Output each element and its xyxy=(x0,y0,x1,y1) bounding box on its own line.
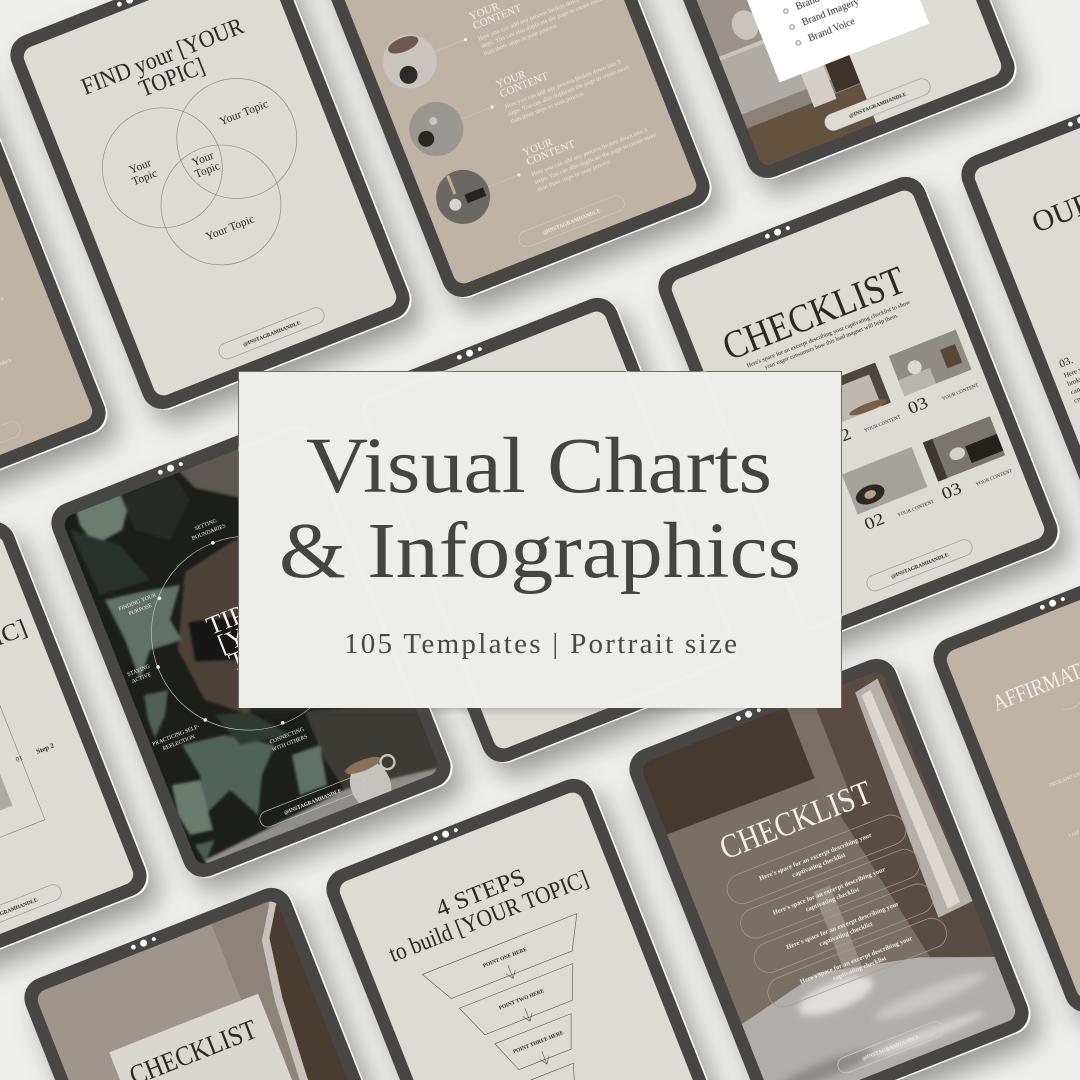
tablet: left steps page xyxy=(0,515,155,994)
step labels: 01 xyxy=(15,754,24,764)
circle photo three xyxy=(436,170,490,224)
title panel xyxy=(62,187,1047,867)
squiggle xyxy=(1062,702,1080,710)
pill text: captivating checklist xyxy=(805,886,861,914)
content one: than three steps in your process xyxy=(483,22,559,57)
heading: TOPIC] xyxy=(225,619,313,677)
pill text: Here's space for an excerpt describing your xyxy=(799,935,914,986)
pill text: captivating checklist xyxy=(832,955,888,982)
venn labels xyxy=(128,102,268,240)
handle pill xyxy=(217,305,327,361)
heading: FIND your [YOUR xyxy=(78,13,248,101)
content three: than three steps in your process xyxy=(536,158,612,193)
venn labels: Your xyxy=(190,150,216,169)
photo: bed xyxy=(808,362,891,429)
heading: CHECKLIST xyxy=(715,774,877,867)
tablet: find your topic venn xyxy=(4,0,418,417)
ring labels xyxy=(84,516,310,793)
pill text: Here's space for an excerpt describing your xyxy=(758,832,873,882)
tablet: left beige content page xyxy=(0,137,108,470)
tablet: brand list with photo xyxy=(683,0,1017,179)
screen xyxy=(974,128,1080,446)
photo frame xyxy=(0,705,45,892)
subtitle: 105 Templates | Portrait size xyxy=(344,628,737,660)
content two: CONTENT xyxy=(498,70,550,100)
content three: Here you can add any process broken down into 3 xyxy=(531,126,648,178)
handle text: @INSTAGRAMHANDLE xyxy=(542,208,602,236)
ring labels: PURPOSE xyxy=(128,603,154,617)
connector dots xyxy=(463,37,521,177)
connectors xyxy=(435,40,519,187)
handle pill xyxy=(836,1019,946,1075)
heading: [YOUR xyxy=(214,601,301,659)
heading: TOPIC] xyxy=(136,53,208,103)
funnel labels: POINT TWO HERE xyxy=(498,988,545,1011)
pill text xyxy=(758,832,917,994)
ring labels: FINDING YOUR xyxy=(118,592,158,613)
content two: Here you can add any process broken down into 3 xyxy=(504,59,622,110)
ring labels: STAYING xyxy=(127,664,151,678)
screen xyxy=(337,789,715,1080)
tablet: 4 steps funnel xyxy=(320,772,734,1080)
circle photo one xyxy=(382,34,437,88)
venn labels: Topic xyxy=(193,160,222,181)
screen xyxy=(946,600,1080,996)
venn diagram xyxy=(102,78,298,266)
ring labels: ACTIVE xyxy=(131,672,153,685)
pill list xyxy=(723,811,951,1011)
faint tablets through panel xyxy=(62,187,1047,867)
pill text: captivating checklist xyxy=(791,851,847,879)
title line two: & Infographics xyxy=(279,508,801,595)
heading: CHECKLIST xyxy=(716,257,911,369)
intro text: Here's space for an excerpt describing your captivating checklist to show xyxy=(746,299,912,369)
step text: 03. xyxy=(1058,354,1075,370)
ring labels: CONNECTING xyxy=(269,727,305,746)
card xyxy=(109,994,365,1080)
handle text: @INSTAGRAMHANDLE xyxy=(890,552,950,580)
ring labels: REFLECTION xyxy=(162,734,196,752)
leaves photo xyxy=(0,400,500,920)
grid labels: 03 xyxy=(939,478,964,503)
panel shadow xyxy=(242,700,842,710)
tablet: checklist with pills on bedroom photo xyxy=(623,652,1037,1080)
tablet: our topic page xyxy=(961,114,1080,480)
grid labels: YOUR CONTENT xyxy=(864,415,902,434)
ring xyxy=(123,507,374,759)
handle pill xyxy=(0,422,20,444)
screen xyxy=(361,308,739,752)
funnel labels: POINT ONE HERE xyxy=(482,946,528,969)
screen xyxy=(0,532,136,976)
handle pill xyxy=(518,196,624,248)
screen xyxy=(760,0,1002,164)
photo xyxy=(696,0,876,164)
heading: 4 STEPS xyxy=(432,864,529,923)
handle text: @INSTAGRAMHANDLE xyxy=(283,788,343,816)
pill text: Here's space for an excerpt describing your xyxy=(772,866,887,917)
screen xyxy=(21,0,399,399)
pill text: captivating checklist xyxy=(818,920,875,948)
grid labels: 02 xyxy=(862,509,887,534)
photo: vase xyxy=(889,330,971,396)
tablet: your content with circles xyxy=(304,0,718,305)
heading xyxy=(202,579,315,680)
ring labels: WITH OTHERS xyxy=(271,734,309,753)
content three: YOUR xyxy=(521,136,555,159)
white card xyxy=(747,0,930,82)
content one: CONTENT xyxy=(471,2,524,32)
title line one: Visual Charts xyxy=(306,423,772,510)
tablet: leaves tips circle xyxy=(0,223,677,1080)
content two: steps. You can also duplicate the page to create more xyxy=(507,64,631,118)
grid labels xyxy=(828,373,1014,534)
pill text: Here's space for an excerpt describing your xyxy=(785,901,900,951)
venn labels: Your xyxy=(128,157,153,176)
handle text: @INSTAGRAMHANDLE xyxy=(242,320,302,348)
funnel xyxy=(422,914,639,1080)
grid labels: YOUR CONTENT xyxy=(975,469,1013,488)
photo xyxy=(35,898,414,1080)
handle text: @INSTAGRAMHANDLE xyxy=(861,1034,921,1062)
heading: to build [YOUR TOPIC] xyxy=(386,866,592,968)
cup xyxy=(342,749,409,815)
tablet: centre behind title xyxy=(344,291,758,770)
funnel arrows xyxy=(503,964,552,1066)
tablet: checklist with photo grid xyxy=(652,170,1066,649)
small text xyxy=(1049,767,1080,839)
venn labels: Your Topic xyxy=(204,213,256,243)
step labels: Step 2 xyxy=(35,741,56,756)
step labels xyxy=(15,741,56,764)
photo: coffee xyxy=(842,447,927,514)
content three: CONTENT xyxy=(525,138,577,168)
bullet list xyxy=(782,0,858,46)
circle photo two xyxy=(409,102,464,156)
step text xyxy=(1059,358,1080,402)
handle pill xyxy=(822,76,933,133)
photo: dark table xyxy=(923,416,1005,482)
ring nodes xyxy=(121,541,286,760)
funnel labels: POINT THREE HERE xyxy=(512,1030,565,1055)
tablet: checklist card bottom-left xyxy=(18,881,432,1080)
content two: than three steps in your process xyxy=(510,90,585,125)
screen xyxy=(321,0,699,287)
bedroom photo xyxy=(640,669,1018,1080)
heading: TIPS TO xyxy=(202,579,300,641)
content two: YOUR xyxy=(494,68,528,91)
handle pill xyxy=(865,537,975,593)
intro text: your eager consumers how this lead magnet will help them. xyxy=(764,313,900,371)
grid labels: 02 xyxy=(828,424,854,449)
funnel labels xyxy=(479,945,565,1055)
venn labels: Your Topic xyxy=(218,98,270,128)
screen xyxy=(0,176,92,455)
grid labels: YOUR CONTENT xyxy=(942,383,980,402)
content three: steps. You can also duplicate the page to create more xyxy=(534,131,658,186)
bullet list: Brand Voice xyxy=(807,16,857,44)
handle pill xyxy=(0,882,64,938)
tablet: affirmations xyxy=(933,586,1080,1012)
grid labels: 03 xyxy=(905,393,931,418)
ring labels: SETTING xyxy=(194,518,218,532)
grid labels: YOUR CONTENT xyxy=(897,500,935,519)
handle pill xyxy=(258,773,368,829)
ring labels: PRACTICING SELF- xyxy=(152,724,200,748)
screen xyxy=(669,187,1047,631)
ring labels: BOUNDARIES xyxy=(191,523,227,542)
content one: YOUR xyxy=(468,0,502,23)
venn labels: Topic xyxy=(131,168,159,188)
handle text: @INSTAGRAMHANDLE xyxy=(848,91,908,120)
